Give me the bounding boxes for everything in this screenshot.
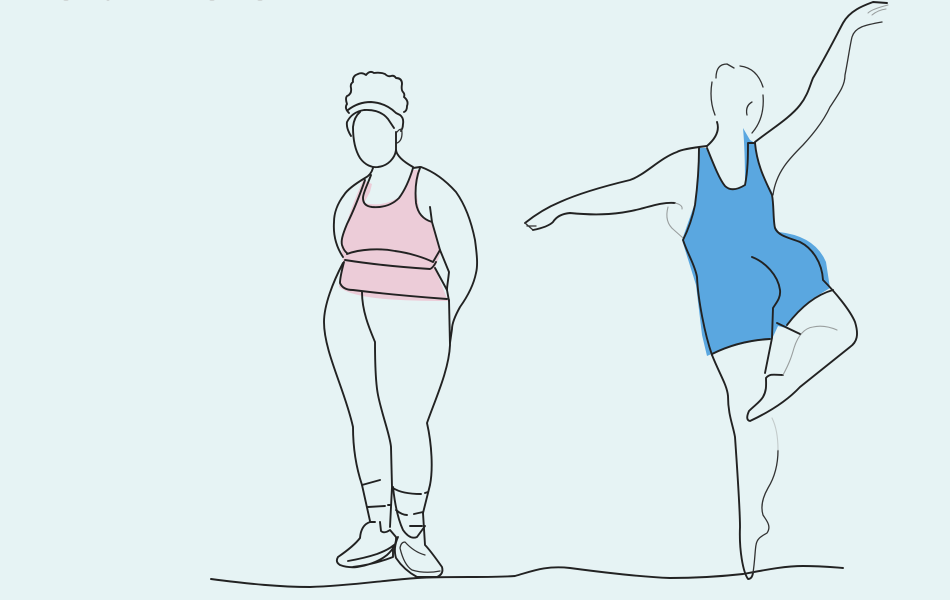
armhole xyxy=(415,168,449,301)
neck and right arm xyxy=(396,150,477,343)
ear xyxy=(397,129,402,143)
right side and raised leg xyxy=(747,143,857,421)
blue leotard colour xyxy=(682,128,830,356)
top bottom edge xyxy=(340,262,447,299)
left arm xyxy=(525,146,707,223)
raised arm xyxy=(755,2,887,142)
neckline xyxy=(363,167,420,207)
calf contour xyxy=(772,418,778,450)
head xyxy=(711,64,763,133)
left leg outer xyxy=(324,263,370,521)
fingers xyxy=(868,5,888,15)
standing leg xyxy=(712,355,753,579)
hip curve xyxy=(752,257,780,373)
pink top colour xyxy=(339,170,448,301)
ear xyxy=(747,102,752,115)
headband xyxy=(348,102,403,131)
hair xyxy=(346,72,408,113)
inner thigh xyxy=(362,292,392,527)
top outline xyxy=(342,180,365,253)
left shoulder and arm xyxy=(334,168,373,257)
figure: dancer on one foot xyxy=(525,2,888,579)
cropped marks at the top edge xyxy=(64,0,262,1)
inner raised leg contour xyxy=(783,326,837,375)
leotard hem xyxy=(712,339,770,354)
socks xyxy=(362,480,428,526)
shorts edge xyxy=(777,290,833,334)
right leg outer xyxy=(423,300,450,513)
figure: woman standing xyxy=(324,72,477,577)
neck xyxy=(707,122,718,146)
neckline xyxy=(707,143,755,189)
bands xyxy=(345,249,447,290)
leotard left side xyxy=(683,148,712,355)
face xyxy=(353,112,396,167)
ground line xyxy=(211,566,843,587)
armpit contour xyxy=(667,203,683,238)
left shoe xyxy=(337,522,396,567)
right shoe xyxy=(395,513,442,577)
